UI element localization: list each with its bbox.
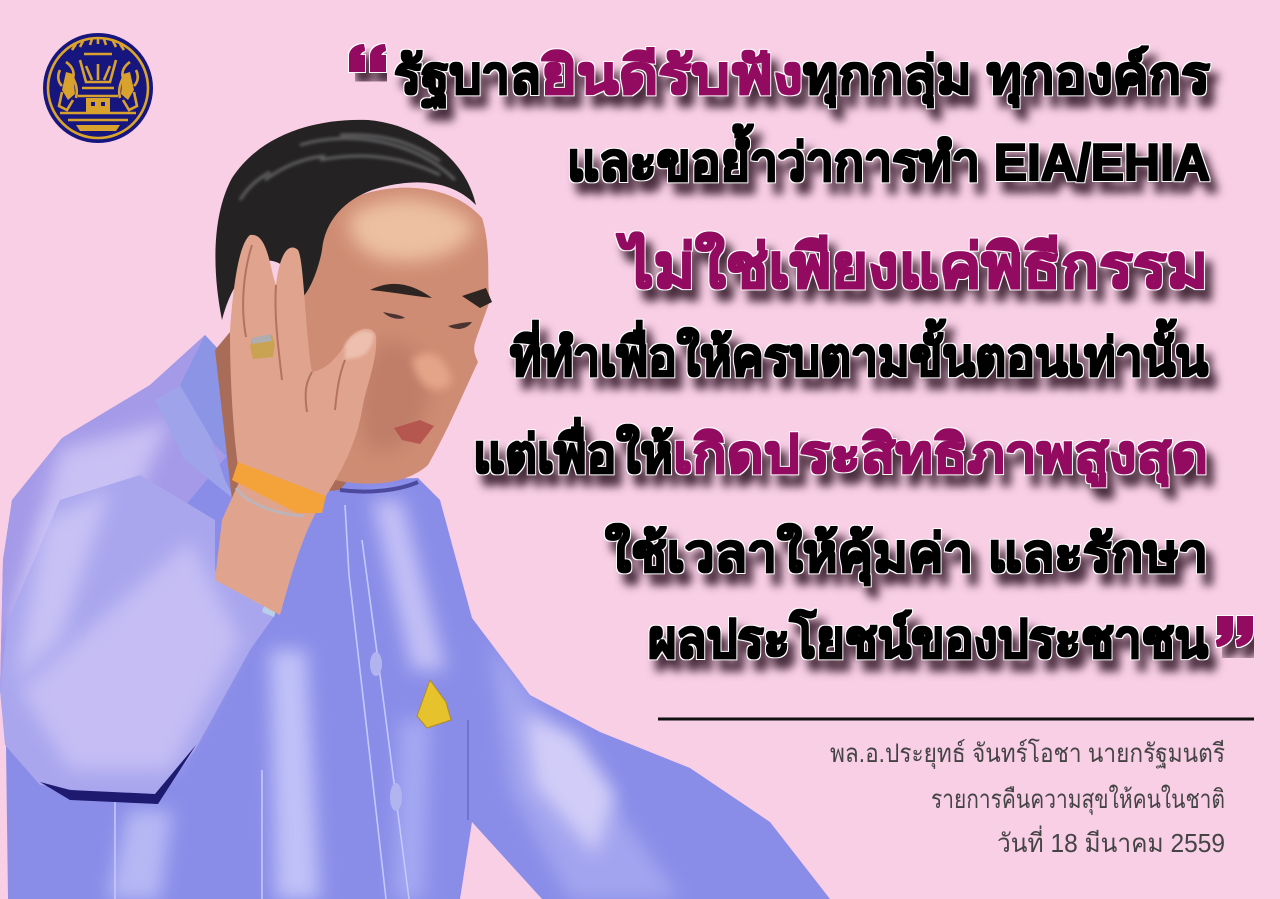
hair — [215, 120, 476, 320]
orange wristband — [232, 462, 326, 513]
line 1 — [394, 46, 1210, 109]
icon: government seal — [43, 33, 153, 143]
attribution text — [830, 738, 1225, 858]
hand — [215, 235, 376, 615]
line 6: ใช้เวลาให้คุ้มค่า และรักษา — [605, 523, 1208, 586]
line 5 — [473, 418, 1208, 487]
jacket — [0, 335, 830, 899]
lapel pin — [417, 680, 451, 728]
opening quote mark — [350, 45, 385, 71]
quote: main statement — [350, 45, 1252, 669]
line 1: รัฐบาล — [394, 47, 541, 109]
line 3: ไม่ใช่เพียงแค่พิธีกรรม — [616, 231, 1208, 300]
sleeve: bent forearm — [0, 475, 292, 804]
line 2: และขอย้ำว่าการทำ EIA/EHIA — [567, 124, 1210, 192]
closing quote mark — [1217, 617, 1252, 646]
collar edge — [340, 482, 418, 492]
line 1: ทุกกลุ่ม ทุกองค์กร — [803, 46, 1210, 108]
line 4: ที่ทำเพื่อให้ครบตามขั้นตอนเท่านั้น — [510, 319, 1208, 387]
neck — [215, 320, 380, 500]
figure: prime minister raising hand — [0, 120, 830, 899]
line 5: แต่เพื่อให้ — [473, 418, 673, 484]
line 1: ยินดีรับฟัง — [541, 47, 803, 105]
attribution text: พล.อ.ประยุทธ์ จันทร์โอชา นายกรัฐมนตรี — [830, 738, 1225, 769]
line 5: เกิดประสิทธิภาพสูงสุด — [673, 426, 1208, 487]
attribution text: วันที่ 18 มีนาคม 2559 — [997, 825, 1225, 858]
head: face — [296, 188, 490, 484]
line 7: ผลประโยชน์ของประชาชน — [648, 608, 1208, 669]
divider rule — [658, 718, 1254, 720]
